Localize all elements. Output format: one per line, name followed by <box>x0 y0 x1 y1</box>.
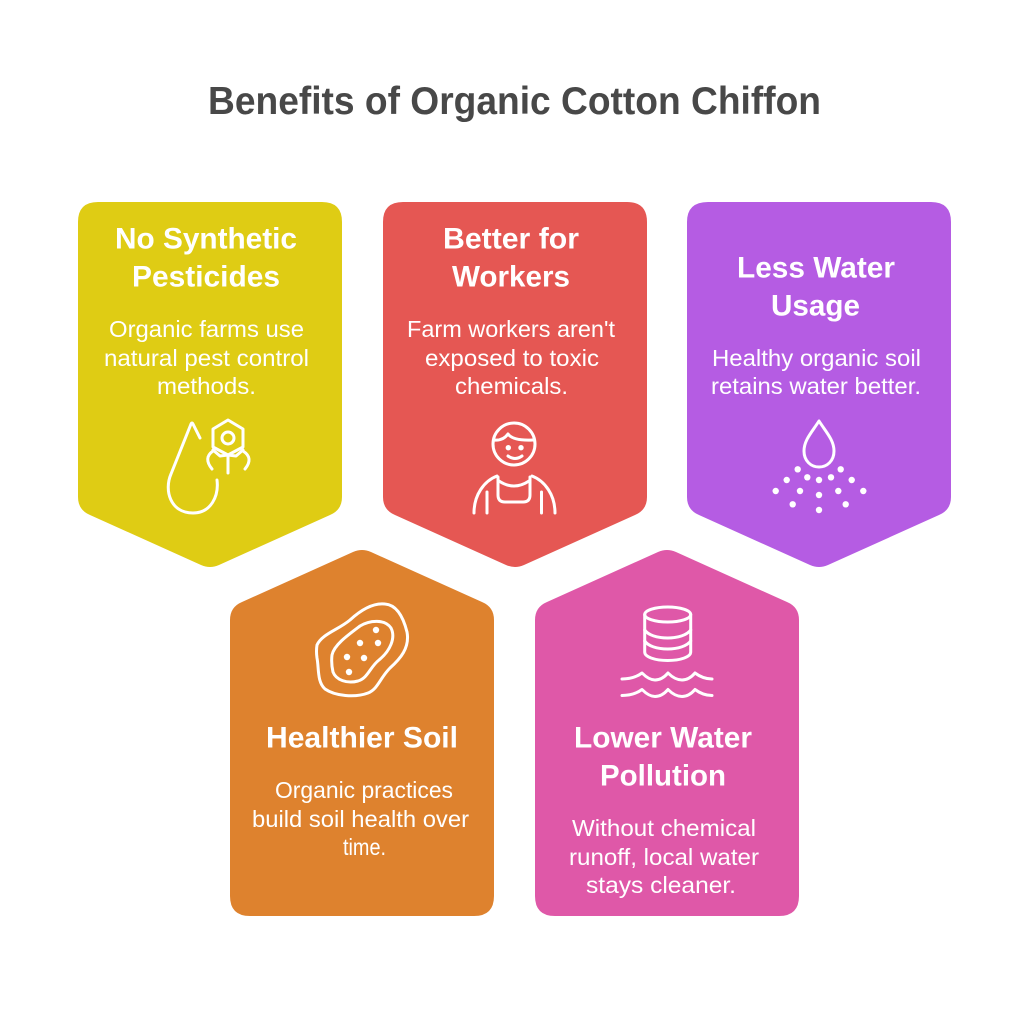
heading: lower water pollution: Pollution <box>600 760 726 792</box>
text: less water usage: retains water better. <box>711 373 921 399</box>
title: Benefits of Organic Cotton Chiffon <box>208 80 821 123</box>
icon: water drop over soil <box>772 421 866 513</box>
text: no synthetic pesticides: natural pest control <box>104 345 309 371</box>
text: better for workers: exposed to toxic <box>425 345 599 371</box>
icon: soil cross-section <box>316 604 408 696</box>
heading: less water usage: Less Water <box>737 252 895 284</box>
panel: healthier soil <box>230 550 494 916</box>
panel: no synthetic pesticides <box>78 202 342 567</box>
text: healthier soil: Organic practices <box>275 777 453 803</box>
text: lower water pollution <box>569 815 759 898</box>
text: no synthetic pesticides: Organic farms use <box>109 316 304 342</box>
heading: no synthetic pesticides <box>115 222 297 294</box>
heading: no synthetic pesticides: Pesticides <box>132 260 280 294</box>
heading: better for workers: Workers <box>452 260 570 294</box>
heading: healthier soil: Healthier Soil <box>266 722 458 754</box>
heading: less water usage <box>737 252 895 322</box>
text: no synthetic pesticides: methods. <box>157 373 256 399</box>
icon: drop with pest molecule <box>168 420 249 513</box>
text: less water usage: Healthy organic soil <box>712 345 921 371</box>
icon: container over water <box>622 607 712 696</box>
text: no synthetic pesticides <box>104 316 309 399</box>
heading: lower water pollution <box>574 722 752 792</box>
heading: less water usage: Usage <box>771 290 860 322</box>
text: better for workers <box>407 316 616 399</box>
panel: lower water pollution <box>535 550 799 916</box>
text: better for workers: Farm workers aren't <box>407 316 616 342</box>
text: lower water pollution: stays cleaner. <box>586 872 736 898</box>
heading: lower water pollution: Lower Water <box>574 722 752 754</box>
heading: better for workers <box>443 222 579 294</box>
text: healthier soil <box>252 777 469 860</box>
heading: better for workers: Better for <box>443 222 579 256</box>
icon: farm worker <box>474 423 555 513</box>
text: lower water pollution: runoff, local water <box>569 844 759 870</box>
text: healthier soil: build soil health over <box>252 806 469 832</box>
text: healthier soil: time. <box>343 834 386 860</box>
panel: better for workers <box>383 202 647 567</box>
text: lower water pollution: Without chemical <box>572 815 756 841</box>
heading: no synthetic pesticides: No Synthetic <box>115 222 297 256</box>
text: less water usage <box>711 345 921 399</box>
panel: less water usage <box>687 202 951 567</box>
text: better for workers: chemicals. <box>455 373 568 399</box>
